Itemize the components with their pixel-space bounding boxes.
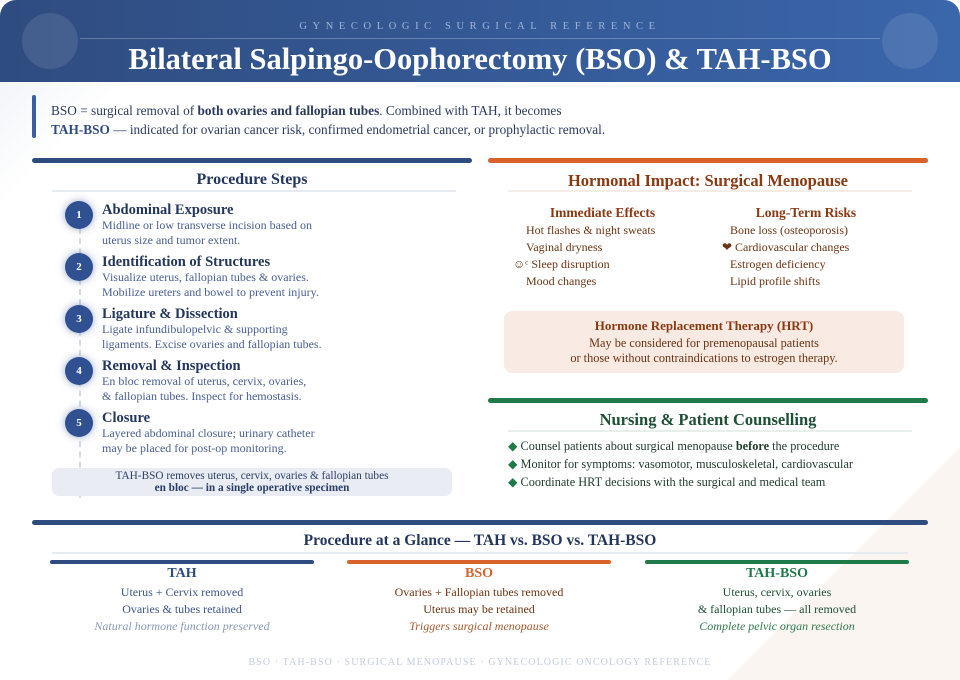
intro text: BSO = surgical removal of both ovaries and fallopian tubes. Combined with TAH, it becomes: [51, 103, 562, 118]
bullet list: ◆ Coordinate HRT decisions with the surgical and medical team: [508, 475, 825, 489]
text: & fallopian tubes. Inspect for hemostasis.: [102, 389, 302, 403]
intro text: TAH-BSO — indicated for ovarian cancer risk, confirmed endometrial cancer, or prophylactic removal.: [51, 122, 605, 137]
text: ligaments. Excise ovaries and fallopian tubes.: [102, 337, 322, 351]
column: TAH: TAH: [167, 566, 197, 581]
column: long-term risks: Bone loss (osteoporosis): [730, 223, 848, 237]
text: Midline or low transverse incision based on: [102, 218, 312, 232]
heading: procedure steps: Procedure Steps: [197, 171, 307, 188]
title: Bilateral Salpingo-Oophorectomy (BSO) & TAH-BSO: [128, 42, 832, 76]
callout: HRT: May be considered for premenopausal patients: [589, 336, 819, 350]
column: TAH-BSO: Complete pelvic organ resection: [699, 619, 855, 633]
intro text: [32, 95, 605, 138]
text: En bloc removal of uterus, cervix, ovaries,: [102, 374, 306, 388]
column: TAH-BSO: [645, 560, 909, 633]
text: Closure: [102, 410, 150, 426]
callout: HRT: Hormone Replacement Therapy (HRT): [595, 318, 813, 333]
callout: en bloc note: en bloc — in a single operative specimen: [155, 482, 349, 494]
step 5: 5: [76, 417, 82, 429]
column: TAH: Natural hormone function preserved: [94, 619, 270, 633]
column: immediate effects: Mood changes: [526, 274, 596, 288]
panel: procedure steps: [32, 158, 472, 498]
footer: BSO · TAH-BSO · SURGICAL MENOPAUSE · GYNECOLOGIC ONCOLOGY REFERENCE: [248, 657, 712, 668]
text: may be placed for post-op monitoring.: [102, 441, 287, 455]
callout: HRT: or those without contraindications to estrogen therapy.: [570, 351, 838, 365]
column: BSO: Uterus may be retained: [423, 602, 535, 616]
callout: en bloc note: [52, 468, 452, 496]
column: TAH-BSO: TAH-BSO: [746, 566, 808, 581]
column: TAH-BSO: & fallopian tubes — all removed: [698, 602, 856, 616]
column: immediate effects: [513, 205, 655, 288]
column: TAH: Uterus + Cervix removed: [121, 585, 243, 599]
column: TAH: Ovaries & tubes retained: [122, 602, 242, 616]
heading: nursing: Nursing & Patient Counselling: [600, 410, 816, 429]
step 4: 4: [76, 365, 82, 377]
heading: comparison: Procedure at a Glance — TAH vs. BSO vs. TAH-BSO: [304, 532, 656, 549]
subtitle: GYNECOLOGIC SURGICAL REFERENCE: [299, 21, 661, 32]
column: TAH: [50, 560, 314, 633]
text: Abdominal Exposure: [102, 202, 233, 218]
text: Visualize uterus, fallopian tubes & ovaries.: [102, 270, 309, 284]
callout: HRT: [504, 311, 904, 373]
column: long-term risks: [722, 205, 856, 288]
column: immediate effects: Immediate Effects: [550, 205, 655, 220]
column: immediate effects: Vaginal dryness: [526, 240, 602, 254]
column: TAH-BSO: Uterus, cervix, ovaries: [723, 585, 831, 599]
column: long-term risks: Lipid profile shifts: [730, 274, 820, 288]
text: Ligature & Dissection: [102, 306, 238, 322]
column: long-term risks: ❤ Cardiovascular changes: [722, 240, 849, 254]
bullet list: ◆ Counsel patients about surgical menopause before the procedure: [508, 439, 839, 453]
bullet list: [508, 439, 853, 489]
text: Removal & Inspection: [102, 358, 241, 374]
step 3: 3: [76, 313, 82, 325]
panel: nursing: [488, 398, 928, 489]
column: long-term risks: Estrogen deficiency: [730, 257, 826, 271]
column: immediate effects: ☺ᶜ Sleep disruption: [513, 257, 610, 271]
panel: comparison: [32, 520, 928, 554]
text: Ligate infundibulopelvic & supporting: [102, 322, 288, 336]
header: [0, 0, 960, 82]
panel: hormonal impact: [488, 158, 928, 192]
column: immediate effects: Hot flashes & night sweats: [526, 223, 655, 237]
column: BSO: Triggers surgical menopause: [409, 619, 549, 633]
heading: hormonal impact: Hormonal Impact: Surgical Menopause: [568, 171, 848, 190]
step 1: 1: [76, 209, 82, 221]
column: BSO: Ovaries + Fallopian tubes removed: [395, 585, 563, 599]
callout: en bloc note: TAH-BSO removes uterus, cervix, ovaries & fallopian tubes: [116, 470, 388, 482]
text: Layered abdominal closure; urinary catheter: [102, 426, 315, 440]
text: uterus size and tumor extent.: [102, 233, 240, 247]
bullet list: ◆ Monitor for symptoms: vasomotor, musculoskeletal, cardiovascular: [508, 457, 853, 471]
column: long-term risks: Long-Term Risks: [756, 205, 856, 220]
step 2: 2: [76, 261, 82, 273]
column: BSO: [347, 560, 611, 633]
column: BSO: BSO: [465, 566, 493, 581]
text: Identification of Structures: [102, 254, 270, 270]
text: Mobilize ureters and bowel to prevent injury.: [102, 285, 319, 299]
